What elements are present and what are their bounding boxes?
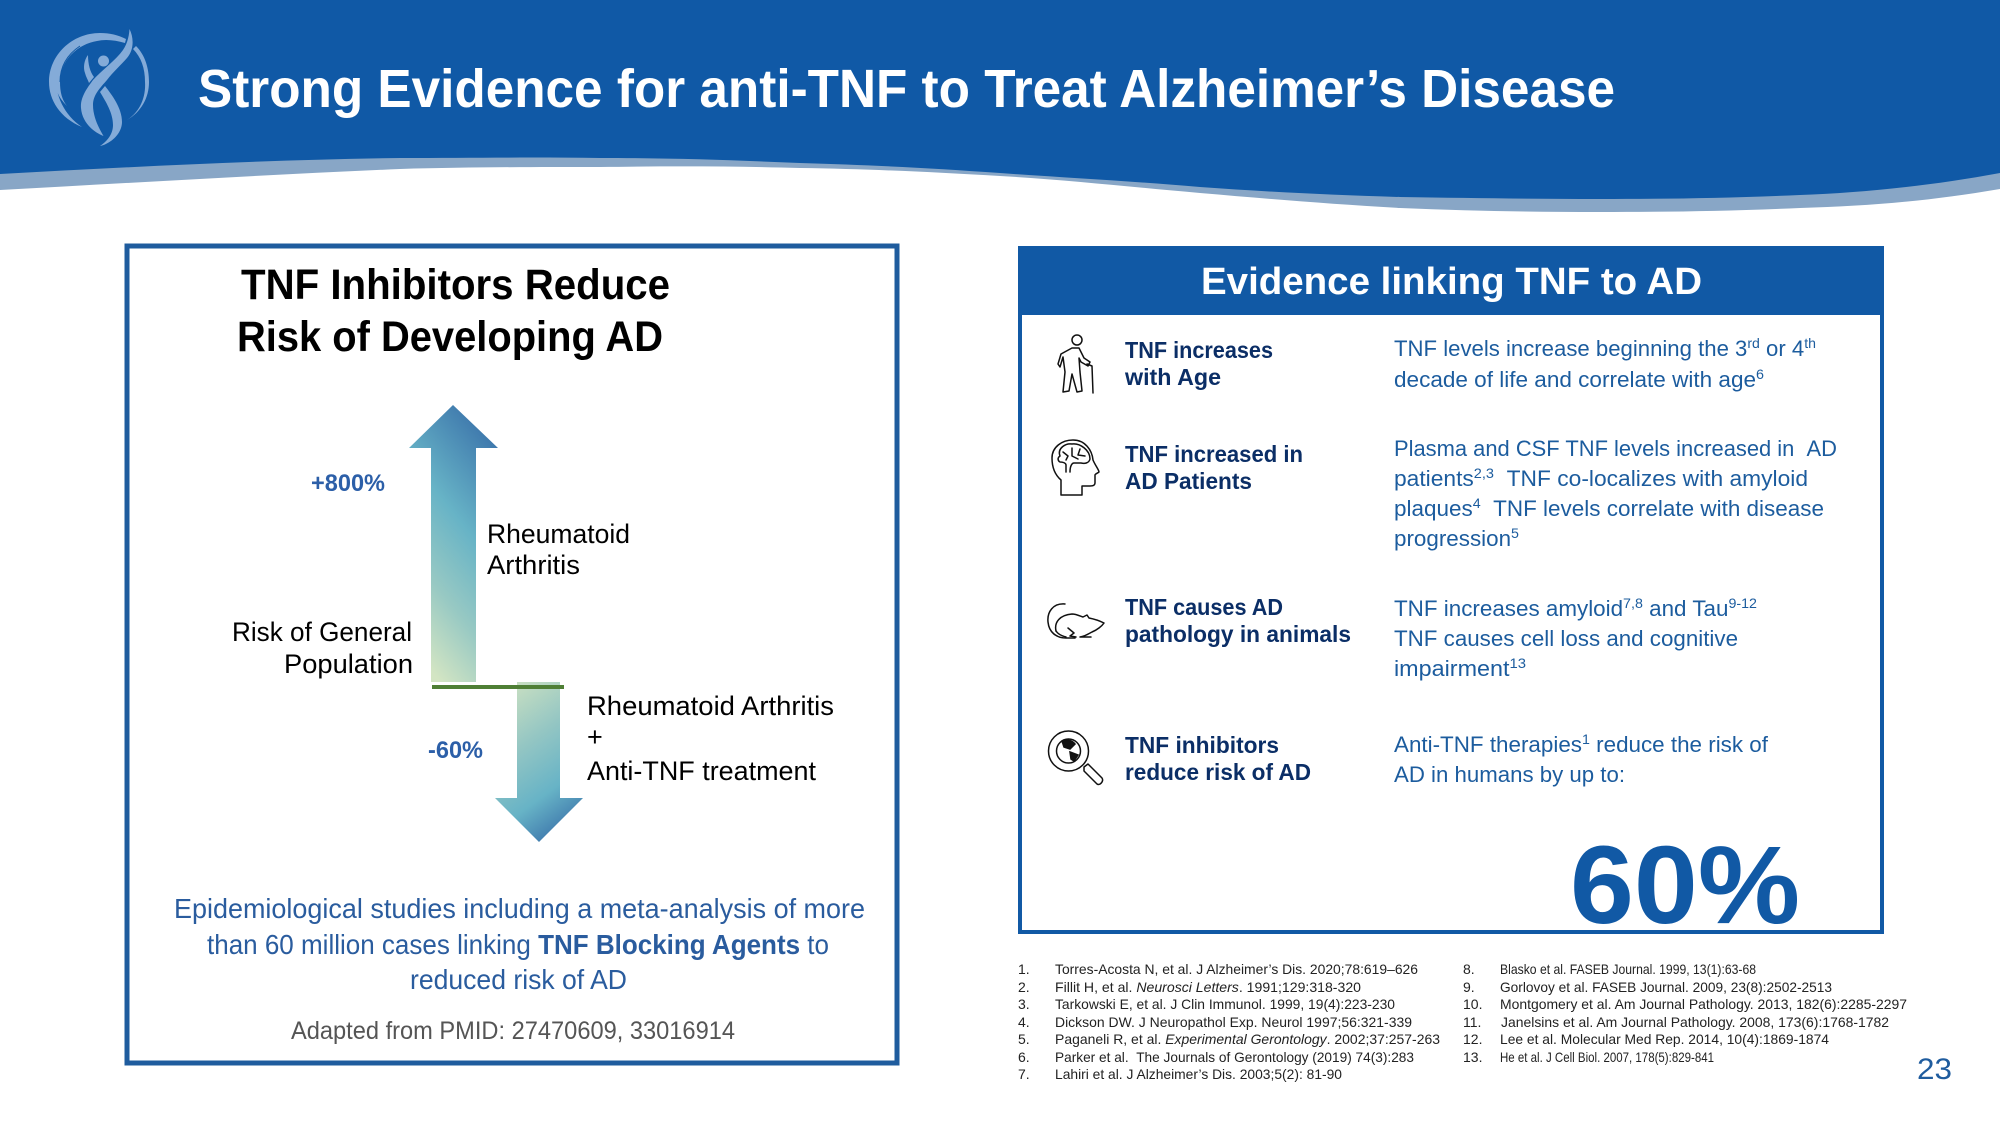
row text: AD patient evidence: 4 xyxy=(1473,495,1481,511)
row text: age evidence: rd xyxy=(1747,335,1760,351)
label: risk of general population: Risk of General xyxy=(232,617,412,647)
references: right column: Blasko et al. FASEB Journal. 1999, 13(1):63-68 xyxy=(1500,961,1756,977)
row text: animal evidence xyxy=(1394,595,1757,681)
arrow: rheumatoid arthritis risk up xyxy=(409,405,498,682)
row text: anti-TNF evidence: 1 xyxy=(1582,731,1590,747)
row heading: TNF inhibitors reduce risk: TNF inhibitors xyxy=(1125,732,1279,758)
references: left column: Torres-Acosta N, et al. J Alzheimer’s Dis. 2020;78:619–626 xyxy=(1055,961,1418,977)
row text: age evidence: TNF levels increase beginning the 3 xyxy=(1394,336,1745,361)
row text: animal evidence: and Tau xyxy=(1643,596,1728,621)
text: epidemiological summary xyxy=(174,893,865,995)
references: right column: Lee et al. Molecular Med Rep. 2014, 10(4):1869-1874 xyxy=(1500,1031,1829,1047)
panel: evidence linking TNF to AD xyxy=(1018,247,1884,947)
label: rheumatoid arthritis: Rheumatoid xyxy=(487,519,630,549)
row text: age evidence xyxy=(1394,335,1816,392)
row text: animal evidence: 9-12 xyxy=(1728,595,1757,611)
label: RA plus anti-TNF treatment: Rheumatoid Arthritis xyxy=(587,691,834,721)
row text: AD patient evidence: plaques xyxy=(1394,496,1471,521)
baseline: general population risk xyxy=(432,685,564,689)
references: left column: Lahiri et al. J Alzheimer’s Dis. 2003;5(2): 81-90 xyxy=(1055,1066,1342,1082)
references: left column: 5. xyxy=(1018,1031,1030,1047)
row text: age evidence: decade of life and correlate with age xyxy=(1394,367,1747,392)
row heading: TNF increased in AD patients: TNF increased in xyxy=(1125,441,1303,467)
references: left column: 3. xyxy=(1018,996,1030,1012)
references: left column: Parker et al. The Journals of Gerontology (2019) 74(3):283 xyxy=(1055,1049,1414,1065)
row text: anti-TNF evidence: reduce the risk of xyxy=(1590,732,1769,757)
references: left column: Dickson DW. J Neuropathol Exp. Neurol 1997;56:321-339 xyxy=(1055,1014,1412,1030)
row heading: TNF increases with age xyxy=(1124,337,1273,390)
label: risk of general population: Population xyxy=(284,649,413,679)
arrow: anti-TNF risk down xyxy=(495,682,583,842)
panel header bar: Evidence linking TNF to AD xyxy=(1201,261,1702,303)
panel heading: TNF Inhibitors Reduce xyxy=(241,261,670,309)
references: left column: Fillit H, et al. Neurosci Letters. 1991;129:318-320 xyxy=(1055,979,1361,995)
row heading: TNF increased in AD patients: AD Patients xyxy=(1125,468,1252,494)
row heading: TNF increased in AD patients xyxy=(1125,441,1303,494)
references: left column: 4. xyxy=(1018,1014,1030,1030)
text: epidemiological summary: Epidemiological studies including a meta-analysis of more xyxy=(174,893,865,924)
panel heading xyxy=(237,261,670,361)
icon: company logo xyxy=(49,29,149,146)
references: right column: 11. xyxy=(1463,1014,1481,1030)
panel header bar xyxy=(1018,247,1884,315)
label: +800%: +800% xyxy=(311,470,385,497)
row text: AD patient evidence: 2,3 xyxy=(1474,465,1494,481)
references: left column: 1. xyxy=(1018,961,1030,977)
title: Strong Evidence for anti-TNF to Treat Alzheimer’s Disease xyxy=(198,59,1615,119)
references: right column: He et al. J Cell Biol. 2007, 178(5):829-841 xyxy=(1500,1049,1714,1065)
references: left column: 7. xyxy=(1018,1066,1030,1082)
text: epidemiological summary: than 60 million cases linking TNF Blocking Agents to xyxy=(207,929,829,960)
references: right column: Montgomery et al. Am Journal Pathology. 2013, 182(6):2285-2297 xyxy=(1500,996,1907,1012)
label: RA plus anti-TNF treatment: Anti-TNF treatment xyxy=(587,756,816,786)
row text: animal evidence: TNF increases amyloid xyxy=(1394,596,1619,621)
row text: anti-TNF evidence: Anti-TNF therapies xyxy=(1394,732,1579,757)
row text: anti-TNF evidence: AD in humans by up to: xyxy=(1394,762,1625,787)
source note: Adapted from PMID: 27470609, 33016914 xyxy=(291,1017,735,1045)
icon: rodent xyxy=(1048,604,1104,638)
references: right column: 12. xyxy=(1463,1031,1482,1047)
panel heading: Risk of Developing AD xyxy=(237,313,663,361)
row text: animal evidence: 13 xyxy=(1509,655,1526,671)
row text: age evidence: th xyxy=(1804,335,1816,351)
row heading: TNF inhibitors reduce risk xyxy=(1125,732,1311,785)
icon: magnifier over globe xyxy=(1048,731,1103,784)
references: left column: 2. xyxy=(1018,979,1030,995)
references: right column xyxy=(1463,961,1907,1065)
row text: anti-TNF evidence xyxy=(1394,731,1769,787)
row heading: TNF causes AD pathology xyxy=(1125,594,1351,647)
row text: age evidence: or 4 xyxy=(1760,336,1804,361)
row heading: TNF inhibitors reduce risk: reduce risk of AD xyxy=(1125,759,1311,785)
panel: TNF inhibitors reduce risk xyxy=(127,246,897,1063)
label: risk of general population xyxy=(232,617,413,679)
references: left column: Paganeli R, et al. Experimental Gerontology. 2002;37:257-263 xyxy=(1055,1031,1440,1047)
label: RA plus anti-TNF treatment xyxy=(587,691,834,786)
icon: head with brain xyxy=(1052,440,1099,495)
row heading: TNF increases with age: with Age xyxy=(1124,364,1221,390)
references: right column: Gorlovoy et al. FASEB Journal. 2009, 23(8):2502-2513 xyxy=(1500,979,1832,995)
references: right column: 8. xyxy=(1463,961,1475,977)
text: epidemiological summary: reduced risk of AD xyxy=(410,964,627,995)
references: right column: Janelsins et al. Am Journal Pathology. 2008, 173(6):1768-1782 xyxy=(1501,1014,1889,1030)
references: left column: 6. xyxy=(1018,1049,1030,1065)
row text: AD patient evidence: Plasma and CSF TNF levels increased in AD xyxy=(1394,436,1837,461)
row text: AD patient evidence: TNF levels correlate with disease xyxy=(1481,496,1824,521)
references: right column: 9. xyxy=(1463,979,1475,995)
label: rheumatoid arthritis xyxy=(487,519,630,580)
references: left column: Tarkowski E, et al. J Clin Immunol. 1999, 19(4):223-230 xyxy=(1055,996,1395,1012)
row text: age evidence: 6 xyxy=(1756,366,1764,382)
header banner xyxy=(0,0,2000,212)
big number: 60%: 60% xyxy=(1570,824,1800,947)
icon: elderly person with cane xyxy=(1058,335,1093,393)
label: RA plus anti-TNF treatment: + xyxy=(587,722,603,752)
page number: 23 xyxy=(1917,1053,1952,1086)
row text: animal evidence: TNF causes cell loss and cognitive xyxy=(1394,626,1738,651)
label: rheumatoid arthritis: Arthritis xyxy=(487,550,580,580)
row text: AD patient evidence: patients xyxy=(1394,466,1471,491)
references: right column: 13. xyxy=(1463,1049,1482,1065)
row text: AD patient evidence: TNF co-localizes with amyloid xyxy=(1494,466,1808,491)
row text: AD patient evidence xyxy=(1394,436,1837,551)
row text: AD patient evidence: 5 xyxy=(1511,525,1519,541)
row text: animal evidence: impairment xyxy=(1394,656,1503,681)
references: left column xyxy=(1018,961,1440,1082)
label: -60%: -60% xyxy=(428,737,483,764)
row heading: TNF causes AD pathology: TNF causes AD xyxy=(1125,594,1283,620)
row text: animal evidence: 7,8 xyxy=(1623,595,1643,611)
row heading: TNF causes AD pathology: pathology in animals xyxy=(1125,621,1351,647)
row heading: TNF increases with age: TNF increases xyxy=(1125,337,1273,363)
references: right column: 10. xyxy=(1463,996,1482,1012)
row text: AD patient evidence: progression xyxy=(1394,526,1509,551)
